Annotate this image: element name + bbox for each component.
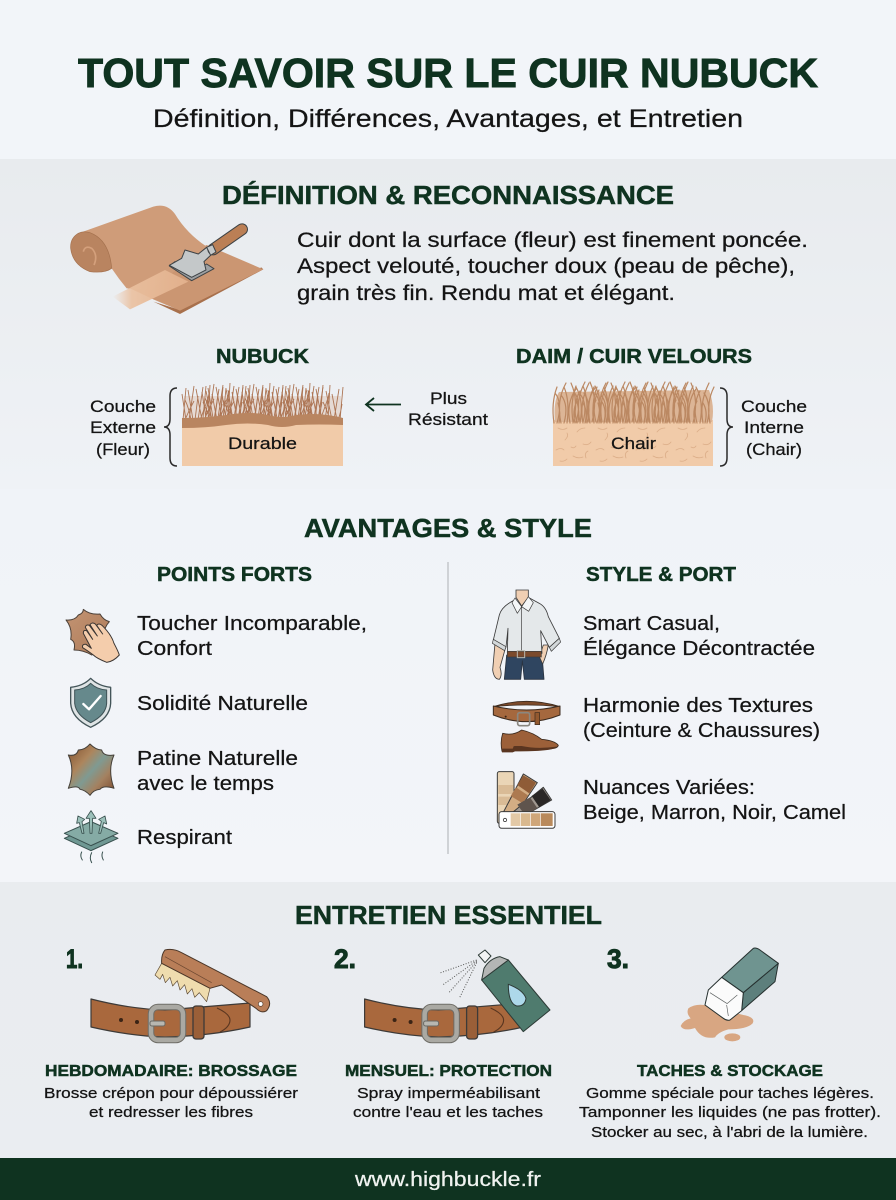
text: respirant: Respirant [137,827,232,849]
text: nuances [583,777,846,824]
text: toucher: Toucher Incomparable, [137,613,367,635]
definition text: grain très fin. Rendu mat et élégant. [297,282,675,305]
panel: définition et reconnaissance [0,159,896,489]
label: couche externe [90,397,156,459]
text: toucher: Confort [137,638,212,660]
step 2 caption: contre l'eau et les taches [353,1105,543,1121]
label: plus résistant [408,389,488,429]
label: couche externe: Externe [90,418,156,437]
icon: leather roll with sanding tool [71,206,263,314]
icon: colour swatches [497,772,555,828]
step 2 caption: MENSUEL: PROTECTION [345,1063,552,1080]
icon: leather with hand [66,609,119,662]
label: chair: Chair [611,434,656,453]
icon: belt with brush [91,949,270,1040]
label: plus résistant: Plus [430,389,467,408]
heading: style et port: STYLE & PORT [586,564,736,586]
icon: shield [71,678,111,727]
heading: entretien: ENTRETIEN ESSENTIEL [295,900,602,930]
step 3 caption [579,1063,881,1141]
step 2 caption [345,1063,552,1121]
heading: points forts: POINTS FORTS [157,564,312,586]
panel: entretien essentiel [0,882,896,1158]
text: toucher [137,613,367,660]
label: plus résistant: Résistant [408,410,488,429]
text: patine: Patine Naturelle [137,748,298,770]
step 3 caption: Gomme spéciale pour taches légères. [586,1086,874,1102]
label: couche interne: Interne [744,418,804,437]
label: couche externe: Couche [90,397,156,416]
label: couche interne [741,397,807,459]
step 1 caption: HEBDOMADAIRE: BROSSAGE [45,1063,297,1080]
text: patine [137,748,298,795]
title: TOUT SAVOIR SUR LE CUIR NUBUCK [78,50,818,96]
panel: avantages et style [0,489,896,882]
heading: avantages: AVANTAGES & STYLE [304,513,592,543]
label: couche interne: Couche [741,397,807,416]
step 1 caption: et redresser les fibres [89,1105,253,1121]
heading: définition: DÉFINITION & RECONNAISSANCE [222,180,674,210]
text: patine: avec le temps [137,773,274,795]
icon: belt with spray [365,950,550,1040]
footer url: www.highbuckle.fr [354,1169,541,1191]
step 1 caption: Brosse crépon pour dépoussiérer [44,1086,298,1102]
subtitle: Définition, Différences, Avantages, et Entretien [153,105,743,133]
bracket left [164,388,177,466]
step 3 number: 3. [607,944,629,974]
icon: eraser on stain [681,948,778,1041]
text: nuances: Nuances Variées: [583,777,755,799]
icon: breathable layers [64,811,118,863]
step 1 number: 1. [66,944,83,974]
diagram: nubuck layers [182,383,343,466]
text: smart casual: Élégance Décontractée [583,637,815,660]
arrow [366,398,401,411]
icon: man in smart casual [492,590,561,679]
text: nuances: Beige, Marron, Noir, Camel [583,802,846,824]
label: couche interne: (Chair) [746,440,802,459]
text: solidité: Solidité Naturelle [137,693,308,715]
step 1 caption [44,1063,298,1121]
icon: belt and shoe [493,701,560,752]
step 2 caption: Spray imperméabilisant [357,1086,540,1102]
definition text: Cuir dont la surface (fleur) est finement poncée. [297,229,808,252]
text: harmonie: Harmonie des Textures [583,695,813,717]
text: harmonie [583,695,820,742]
heading: nubuck: NUBUCK [216,346,310,368]
step 3 caption: Tamponner les liquides (ne pas frotter). [579,1105,881,1121]
definition text [297,229,808,305]
text: smart casual: Smart Casual, [583,613,720,635]
definition text: Aspect velouté, toucher doux (peau de pêche), [297,255,795,278]
label: durable: Durable [228,434,297,453]
header [78,50,818,133]
bracket right [720,388,733,466]
step 3 caption: TACHES & STOCKAGE [637,1063,823,1080]
text: smart casual [583,613,815,660]
heading: daim: DAIM / CUIR VELOURS [516,346,752,368]
text: harmonie: (Ceinture & Chaussures) [583,720,820,742]
step 3 caption: Stocker au sec, à l'abri de la lumière. [591,1125,868,1141]
diagram: daim layers [553,382,714,466]
icon: patina leather [68,744,114,795]
footer [0,1158,896,1200]
label: couche externe: (Fleur) [96,440,150,459]
step 2 number: 2. [334,944,356,974]
